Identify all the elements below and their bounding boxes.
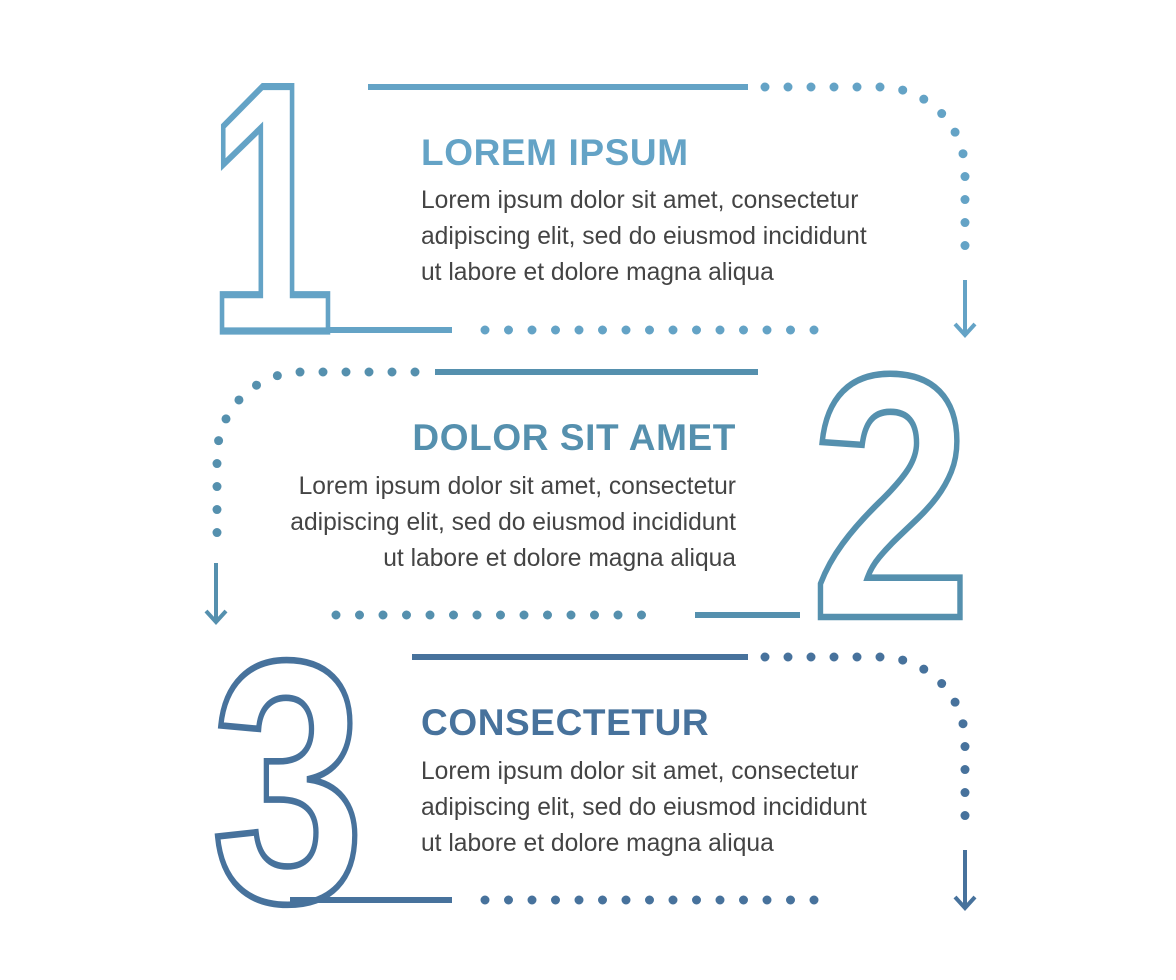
- heading 2: DOLOR SIT AMET: [412, 417, 736, 458]
- step 3 graphics: [211, 590, 975, 975]
- text 3: adipiscing elit, sed do eiusmod incididunt: [421, 794, 867, 821]
- text 2: [290, 473, 736, 572]
- text 1: ut labore et dolore magna aliqua: [421, 259, 774, 286]
- text 1: Lorem ipsum dolor sit amet, consectetur: [421, 187, 858, 214]
- number 3: 3: [211, 590, 365, 975]
- step 1 graphics: [208, 11, 975, 407]
- number 1: 1: [208, 11, 334, 407]
- arrow 2: [206, 563, 226, 622]
- arrow 3: [955, 850, 975, 908]
- text 3: ut labore et dolore magna aliqua: [421, 830, 774, 857]
- text 3: [421, 758, 867, 857]
- text 1: [421, 187, 867, 286]
- text 2: adipiscing elit, sed do eiusmod incididunt: [290, 509, 736, 536]
- text 2: ut labore et dolore magna aliqua: [383, 545, 736, 572]
- text 1: adipiscing elit, sed do eiusmod incididunt: [421, 223, 867, 250]
- text 3: Lorem ipsum dolor sit amet, consectetur: [421, 758, 858, 785]
- heading 3: CONSECTETUR: [421, 702, 709, 743]
- step 2 graphics: [206, 302, 972, 691]
- heading 1: LOREM IPSUM: [421, 132, 689, 173]
- arrow 1: [955, 280, 975, 335]
- text 2: Lorem ipsum dolor sit amet, consectetur: [299, 473, 736, 500]
- number 2: 2: [810, 302, 972, 691]
